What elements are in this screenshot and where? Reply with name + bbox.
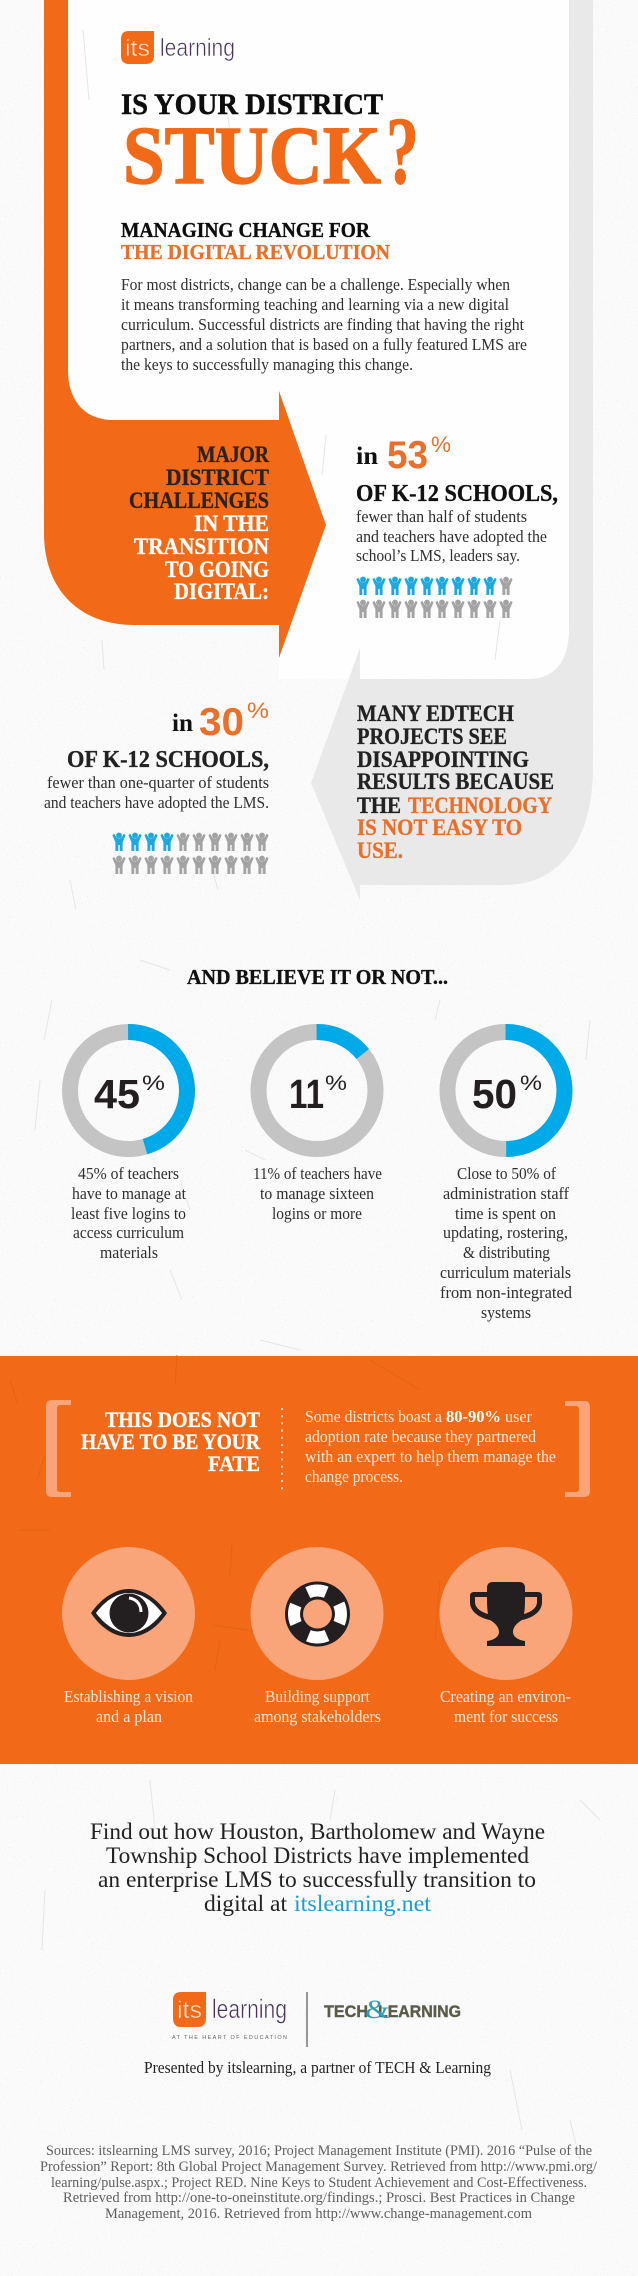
caption: 45 percent: least five logins to	[71, 1204, 186, 1223]
heading: major district challenges: MAJOR	[197, 442, 269, 467]
callout: edtech projects: TECHNOLOGY	[408, 793, 552, 818]
callout: edtech projects: IS NOT EASY TO	[357, 815, 522, 840]
text block: adoption rate: change process.	[305, 1467, 403, 1486]
text block: adoption rate: user	[505, 1407, 532, 1426]
heading: and believe it or not: AND BELIEVE IT OR NOT...	[187, 965, 448, 989]
callout: edtech projects: RESULTS BECAUSE	[357, 769, 554, 794]
logo: itslearning footer	[172, 1992, 287, 2041]
captions: orange band	[64, 1687, 571, 1726]
callout: edtech projects: DISAPPOINTING	[357, 747, 529, 772]
caption: 50 percent: updating, rostering,	[443, 1223, 568, 1242]
caption: 50 percent: & distributing	[463, 1243, 550, 1262]
caption: 50 percent: administration staff	[443, 1184, 569, 1203]
stat: 53 percent: in	[356, 443, 378, 470]
caption: 45 percent: 45% of teachers	[78, 1164, 179, 1183]
bracket: left	[46, 1400, 71, 1497]
icon row: 53 percent people	[356, 577, 513, 618]
text block: intro: partners, and a solution that is based on a fully featured LMS are	[121, 335, 527, 354]
heading: this does not have to be your fate: FATE	[208, 1451, 260, 1476]
text block: adoption rate: Some districts boast a	[305, 1407, 443, 1426]
caption: 45 percent	[71, 1164, 186, 1262]
caption: 11 percent: 11% of teachers have	[253, 1164, 382, 1183]
captions: orange band: Building support	[265, 1687, 370, 1706]
icon: trophy	[440, 1547, 572, 1680]
heading: major district challenges: IN THE	[194, 511, 269, 536]
heading: this does not have to be your fate: THIS DOES NOT	[105, 1407, 260, 1432]
caption: 45 percent: have to manage at	[72, 1184, 186, 1203]
logo: tech and learning: LEARNING	[378, 2002, 461, 2021]
heading: managing change	[121, 218, 390, 264]
stat: 53 percent	[356, 432, 558, 565]
heading: this does not have to be your fate: HAVE TO BE YOUR	[81, 1429, 261, 1454]
text block: intro	[121, 275, 527, 374]
heading: major district challenges	[129, 442, 269, 604]
logo: itslearning footer: AT THE HEART OF EDUCATION	[172, 2035, 287, 2041]
stat: 30 percent: 30	[199, 701, 244, 744]
chart: donut 11 percent: %	[325, 1072, 347, 1095]
chart: donut 11 percent	[258, 1032, 376, 1149]
chart: donut 11 percent: 11	[289, 1071, 324, 1117]
text block: adoption rate: adoption rate because they partnered	[305, 1427, 537, 1446]
logo: itslearning: its	[125, 35, 150, 61]
text block: intro: For most districts, change can be a challenge. Especially when	[121, 275, 510, 294]
logo: itslearning footer: its	[177, 1997, 202, 2024]
logo: itslearning: learning	[160, 34, 235, 62]
logo: tech and learning: &	[365, 1995, 390, 2024]
stat: 30 percent: fewer than one-quarter of students	[47, 773, 269, 792]
text block: adoption rate: 80-90%	[446, 1407, 501, 1426]
caption: 50 percent: from non-integrated	[440, 1283, 573, 1302]
chart: donut 45 percent	[70, 1032, 187, 1149]
text block: find out: itslearning.net	[294, 1891, 431, 1917]
captions: orange band: Creating an environ-	[440, 1687, 571, 1706]
text block: sources: Sources: itslearning LMS survey, 2016; Project Management Institute (PMI). 2016 “Pulse of the	[46, 2143, 592, 2159]
chart: donut 50 percent	[448, 1032, 564, 1149]
text block: adoption rate	[305, 1407, 556, 1486]
logo: itslearning	[121, 31, 235, 64]
text block: find out	[90, 1819, 545, 1917]
heading: major district challenges: CHALLENGES	[129, 488, 269, 513]
caption: 50 percent	[440, 1164, 573, 1322]
callout: edtech projects: THE	[357, 793, 401, 818]
text block: intro: the keys to successfully managing this change.	[121, 355, 413, 374]
text block: find out: digital at	[204, 1891, 287, 1917]
captions: orange band: Establishing a vision	[64, 1687, 193, 1706]
icon row: 30 percent people	[112, 833, 269, 874]
chart: donut 45 percent: %	[142, 1072, 165, 1095]
logo: tech and learning: TECH	[324, 2002, 368, 2021]
heading: major district challenges: DIGITAL:	[174, 579, 269, 604]
stat: 53 percent: OF K-12 SCHOOLS,	[356, 481, 558, 507]
text block: adoption rate: with an expert to help them manage the	[305, 1447, 556, 1466]
stat: 53 percent: 53	[387, 434, 428, 477]
heading: managing change: MANAGING CHANGE FOR	[121, 218, 371, 242]
text: presented by: Presented by itslearning, a partner of TECH & Learning	[144, 2058, 491, 2077]
logo: itslearning footer: learning	[212, 1994, 287, 2024]
stat: 30 percent: %	[247, 698, 269, 723]
caption: 11 percent: logins or more	[272, 1204, 362, 1223]
captions: orange band: ment for success	[454, 1707, 558, 1726]
heading: this does not have to be your fate	[81, 1407, 261, 1476]
captions: orange band: among stakeholders	[254, 1707, 381, 1726]
heading: major district challenges: TO GOING	[165, 557, 269, 582]
caption: 45 percent: access curriculum	[73, 1223, 184, 1242]
text block: find out: an enterprise LMS to successfully transition to	[98, 1867, 536, 1893]
text block: intro: it means transforming teaching and learning via a new digital	[121, 295, 509, 314]
callout: edtech projects	[357, 701, 554, 863]
captions: orange band: and a plan	[96, 1707, 162, 1726]
stat: 53 percent: and teachers have adopted the	[356, 527, 547, 546]
panel: orange band	[0, 1355, 638, 1764]
text block: intro: curriculum. Successful districts are finding that having the right	[121, 315, 524, 334]
text block: sources: learning/pulse.aspx.; Project RED. Nine Keys to Student Achievement and Cost-Effectiveness.	[51, 2175, 587, 2191]
title: STUCK	[123, 109, 381, 201]
stat: 53 percent: %	[431, 432, 451, 457]
logo: tech and learning	[324, 1995, 461, 2024]
callout: edtech projects: USE.	[357, 838, 403, 863]
callout: edtech projects: MANY EDTECH	[357, 701, 514, 726]
title: IS YOUR DISTRICT	[121, 88, 383, 121]
bracket: right	[565, 1401, 590, 1497]
text block: sources: Profession” Report: 8th Global Project Management Survey. Retrieved from http://www.pmi.org/	[40, 2159, 598, 2175]
text block: sources: Retrieved from http://one-to-oneinstitute.org/findings.; Prosci. Best Practices in Change	[63, 2190, 575, 2206]
panel: gray arrow frame	[311, 0, 593, 900]
stat: 53 percent: fewer than half of students	[356, 507, 527, 526]
chart: donut 45 percent: 45	[94, 1071, 140, 1117]
heading: managing change: THE DIGITAL REVOLUTION	[121, 240, 390, 264]
icon: eye	[62, 1547, 195, 1680]
caption: 50 percent: time is spent on	[455, 1204, 556, 1223]
text block: sources: Management, 2016. Retrieved from http://www.change-management.com	[105, 2206, 533, 2222]
text block: sources	[40, 2143, 598, 2222]
chart: donut 50 percent: 50	[472, 1071, 517, 1117]
stat: 30 percent: in	[172, 710, 193, 737]
heading: major district challenges: DISTRICT	[166, 465, 269, 490]
caption: 50 percent: Close to 50% of	[457, 1164, 556, 1183]
icon: life buoy	[250, 1547, 384, 1680]
panel: orange arrow frame	[44, 0, 326, 658]
stat: 53 percent: school’s LMS, leaders say.	[356, 546, 520, 565]
heading: major district challenges: TRANSITION	[134, 534, 269, 559]
caption: 50 percent: systems	[481, 1303, 531, 1322]
text block: find out: Find out how Houston, Bartholomew and Wayne	[90, 1819, 545, 1845]
callout: edtech projects: PROJECTS SEE	[357, 724, 507, 749]
caption: 11 percent: to manage sixteen	[260, 1184, 374, 1203]
stat: 30 percent: and teachers have adopted the LMS.	[44, 793, 269, 812]
stat: 30 percent: OF K-12 SCHOOLS,	[67, 747, 269, 773]
chart: donut 50 percent: %	[520, 1072, 542, 1095]
caption: 11 percent	[253, 1164, 382, 1223]
caption: 50 percent: curriculum materials	[440, 1263, 571, 1282]
text block: find out: Township School Districts have implemented	[106, 1843, 529, 1869]
stat: 30 percent	[44, 698, 269, 812]
caption: 45 percent: materials	[100, 1243, 158, 1262]
title: ?	[386, 97, 419, 204]
